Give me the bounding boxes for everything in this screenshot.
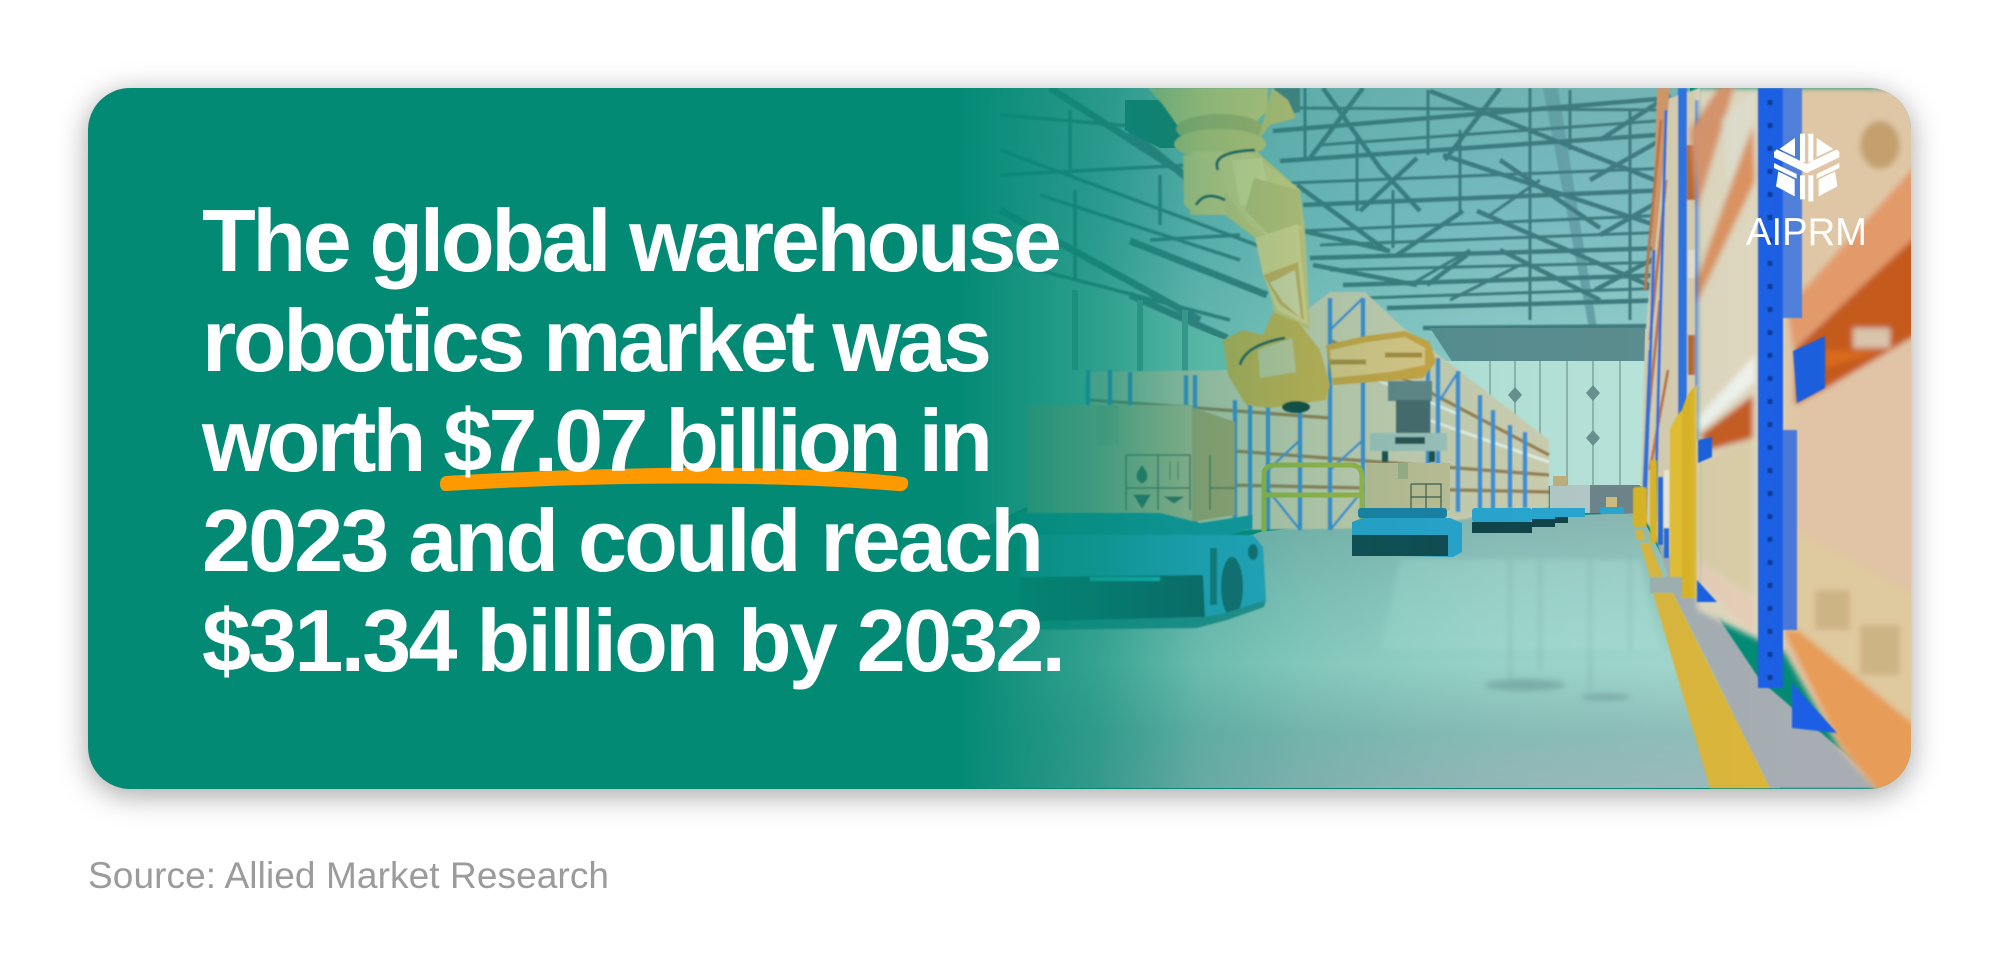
- yellow floor line: [1635, 530, 1770, 788]
- back wall band: [1430, 328, 1645, 361]
- right racking: [1690, 85, 1925, 800]
- end windows: [1440, 361, 1645, 486]
- floor reflections: [1380, 560, 1660, 700]
- logo mark: [1774, 134, 1839, 201]
- mid robot: [1352, 508, 1462, 557]
- headline: robotics market was: [202, 291, 992, 390]
- headline: The global warehouse: [202, 191, 1062, 290]
- floor: [960, 513, 1780, 788]
- far part of right racking: [1640, 88, 1700, 600]
- yellow guards: [1633, 385, 1697, 598]
- photo: warehouse with robots: [960, 85, 1925, 800]
- grey floor strip: [1650, 520, 1885, 788]
- blue uprights: [1697, 88, 1837, 733]
- logo: [1746, 134, 1867, 254]
- headline: worth $7.07 billion in: [201, 391, 993, 490]
- headline: [201, 191, 1066, 690]
- side wall: [984, 290, 1226, 526]
- robot arm: [1148, 88, 1447, 462]
- dark motor block at roof: [1125, 100, 1185, 148]
- colour fade overlay: [960, 88, 1672, 788]
- roof trusses: [1000, 88, 1680, 338]
- logo wordmark: AIPRM: [1746, 211, 1867, 254]
- left racks: [1085, 292, 1549, 535]
- yellow barrier: [1264, 465, 1362, 532]
- ceiling: [960, 88, 1690, 378]
- orange underline: [440, 468, 908, 491]
- source line: Source: Allied Market Research: [88, 855, 609, 896]
- panel: statistic card: [88, 85, 1925, 800]
- headline: $31.34 billion by 2032.: [202, 591, 1066, 690]
- near robot: [1020, 513, 1266, 630]
- large box: [1027, 405, 1235, 522]
- robot box: [1365, 463, 1450, 510]
- headline: 2023 and could reach: [202, 491, 1044, 590]
- far robots: [1472, 507, 1624, 533]
- end wall base: [1550, 476, 1640, 513]
